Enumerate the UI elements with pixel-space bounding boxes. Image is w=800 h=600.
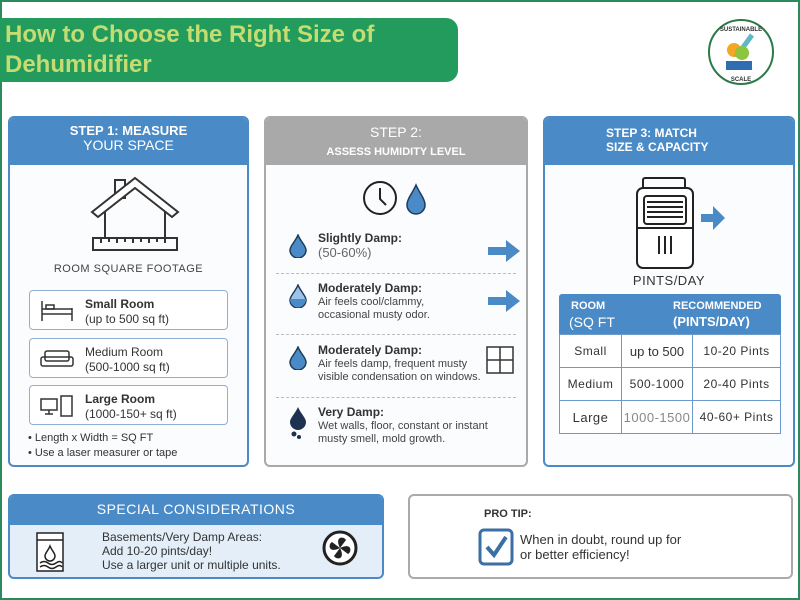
item: moderately damp 1: occasional musty odor. (318, 309, 430, 321)
item: moderately damp 1: Moderately Damp: (318, 281, 422, 295)
logo: SUSTAINABLE (720, 27, 762, 33)
panel: step 2 (264, 116, 528, 467)
item: moderately damp 2: Air feels damp, frequent musty (318, 358, 467, 370)
item: slightly damp (289, 231, 520, 262)
table: sizing: up to 500 (630, 344, 684, 358)
heading: step 2: ASSESS HUMIDITY LEVEL (326, 146, 466, 158)
heading: step 1: STEP 1: MEASURE (70, 123, 187, 138)
room: small (29, 290, 228, 330)
panel: special considerations (8, 494, 384, 579)
item: slightly damp: (50-60%) (318, 245, 371, 260)
icon: basement water (36, 532, 64, 572)
item: slightly damp: Slightly Damp: (318, 231, 402, 245)
table: sizing: Medium (568, 377, 613, 391)
item: moderately damp 2 (289, 343, 514, 383)
room: large (29, 385, 228, 425)
room: small: (up to 500 sq ft) (85, 312, 169, 326)
table: sizing: 40-60+ Pints (700, 410, 773, 424)
table: sizing: 1000-1500 (624, 410, 690, 424)
icon: house with ruler (90, 176, 180, 251)
heading: step 1: YOUR SPACE (83, 137, 174, 153)
item: moderately damp 1: Air feels cool/clammy, (318, 296, 424, 308)
table: sizing: Small (574, 344, 607, 358)
table: sizing: ROOM (571, 300, 605, 312)
panel: step 1 (8, 116, 249, 467)
heading: step 2 (266, 118, 526, 165)
room: small: Small Room (85, 297, 154, 311)
icon: dehumidifier (636, 177, 725, 269)
item: very damp: Very Damp: (318, 405, 384, 419)
item: very damp: Wet walls, floor, constant or instant (318, 420, 488, 432)
title banner: How to Choose the Right Size of Dehumidifier (5, 21, 374, 78)
room: large: Large Room (85, 392, 155, 406)
table: sizing: 500-1000 (630, 377, 684, 391)
table: sizing: Large (573, 410, 608, 424)
text: basements: Add 10-20 pints/day! (102, 544, 212, 558)
logo: SCALE (731, 77, 751, 83)
heading: step 1 (10, 118, 247, 165)
item: very damp: musty smell, mold growth. (318, 433, 445, 445)
text: pro tip (520, 532, 681, 562)
item: moderately damp 2: visible condensation on windows. (318, 371, 481, 383)
text: pints/day: PINTS/DAY (633, 273, 705, 288)
room: large: (1000-150+ sq ft) (85, 407, 177, 421)
table: sizing: 20-40 Pints (703, 377, 770, 391)
room: medium (29, 338, 228, 378)
table: sizing: 10-20 Pints (703, 344, 770, 358)
icon: fan (322, 530, 358, 566)
heading: step 3: SIZE & CAPACITY (606, 140, 708, 154)
heading: step 3: STEP 3: MATCH (606, 126, 697, 140)
panel: step 3 (543, 116, 795, 467)
icon: clock and drop (363, 181, 426, 215)
text: basements: Basements/Very Damp Areas: (102, 530, 262, 544)
table: sizing: (SQ FT (569, 314, 615, 330)
table: sizing: (PINTS/DAY) (673, 314, 750, 329)
item: moderately damp 1 (289, 281, 520, 321)
item: moderately damp 2: Moderately Damp: (318, 343, 422, 357)
item: very damp (290, 405, 488, 445)
icon: checkbox (478, 528, 514, 566)
logo (708, 19, 774, 85)
text: room square footage: ROOM SQUARE FOOTAGE (54, 263, 203, 275)
heading: step 2: STEP 2: (370, 124, 422, 140)
panel: pro tip (408, 494, 793, 579)
table: sizing (559, 294, 781, 434)
text: tips: • Length x Width = SQ FT (28, 432, 153, 444)
table: sizing: RECOMMENDED (673, 300, 762, 312)
heading: step 3 (545, 118, 793, 165)
heading: special considerations: SPECIAL CONSIDERATIONS (97, 501, 295, 517)
room: medium: (500-1000 sq ft) (85, 360, 170, 374)
heading: pro tip: PRO TIP: (484, 508, 532, 520)
heading: special considerations (10, 496, 382, 525)
text: pro tip: When in doubt, round up for (520, 532, 681, 547)
text: pro tip: or better efficiency! (520, 547, 630, 562)
text: basements (102, 530, 281, 572)
text: tips (28, 432, 177, 459)
text: basements: Use a larger unit or multiple units. (102, 558, 281, 572)
room: medium: Medium Room (85, 345, 163, 359)
text: tips: • Use a laser measurer or tape (28, 447, 177, 459)
